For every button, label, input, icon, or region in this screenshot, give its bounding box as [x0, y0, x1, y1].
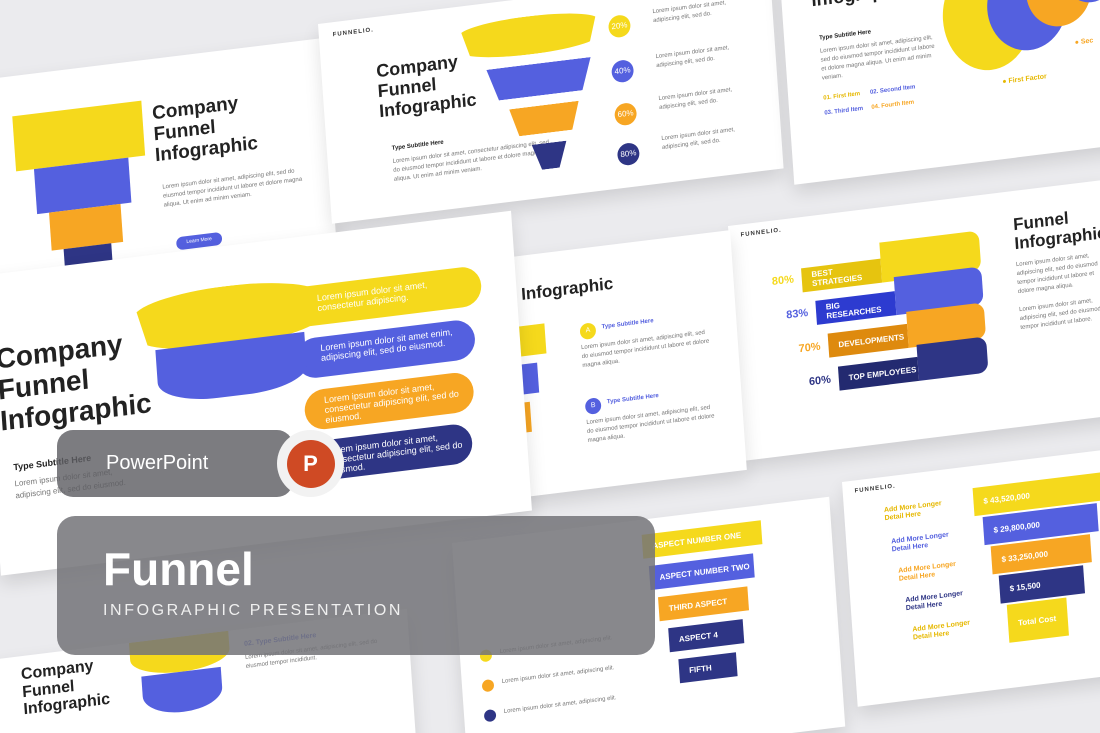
slide: bottom middle stepped funnel: ASPECT NUMBER ONE [652, 530, 741, 550]
slide: funnel percentages: FUNNELIO. [333, 27, 374, 38]
heading [152, 93, 259, 166]
ribbons: 83% [786, 307, 809, 322]
slide: bottom right money funnel: Detail Here [913, 630, 950, 641]
slide: 3D stacked funnel [0, 38, 337, 300]
slide: bottom right money funnel: Add More Longer [898, 561, 956, 575]
slide: bottom left: Funnel [22, 678, 75, 701]
heading: Funnel [377, 74, 437, 101]
slide: bottom middle stepped funnel: THIRD ASPECT [668, 596, 727, 613]
ribbons: BIG RESEARCHES [825, 301, 882, 321]
slide: top right circles: Lorem ipsum dolor sit amet, adipiscing elit, sed do eiusmod tempor incididunt ut labore et dolore magna aliqua. Ut enim ad minim veniam. [820, 35, 935, 82]
funnel: Lorem ipsum dolor sit amet enim, adipiscing elit, sed do eiusmod. [320, 327, 453, 363]
slide: bottom middle stepped funnel: Lorem ipsum dolor sit amet, adipiscing elit. [504, 695, 617, 715]
slide: bottom middle stepped funnel: ASPECT NUMBER TWO [659, 561, 750, 581]
slide: bottom left: Infographic [23, 691, 111, 718]
subtitle: INFOGRAPHIC PRESENTATION [103, 602, 403, 619]
title: Funnel [103, 543, 254, 595]
3D blocks [12, 100, 146, 266]
funnel [136, 267, 482, 479]
heading: Infographic [0, 387, 153, 436]
ribbons: 80% [772, 273, 794, 288]
funnel: Lorem ipsum dolor sit amet, consectetur adipiscing elit, sed do eiusmod. [327, 432, 463, 476]
slide: funnel percentages: Type Subtitle Here [392, 140, 444, 152]
slide: funnel percentages: Lorem ipsum dolor sit amet, adipiscing elit, sed do. [655, 45, 729, 69]
text block: Lorem ipsum dolor sit amet, adipiscing elit, sed do eiusmod tempor incididunt ut labore et dolore magna aliqua. Ut enim ad minim veniam. [162, 168, 302, 209]
funnel: Lorem ipsum dolor sit amet, consectetur adipiscing elit, sed do eiusmod. [324, 381, 459, 425]
slide: right middle funnel ribbons: FUNNELIO. [740, 227, 782, 239]
slide: middle A/B: Lorem ipsum dolor sit amet, adipiscing elit, sed do eiusmod tempor incididunt ut labore et dolore magna aliqua. [581, 330, 709, 369]
slide: bottom right money funnel: Add More Longer [905, 590, 963, 604]
slide: middle A/B: el Infographic [502, 274, 614, 306]
slide: funnel percentages: Lorem ipsum dolor sit amet, consectetur adipiscing elit, sed do eiusmod tempor incididunt ut labore et dolore magna aliqua. Ut enim ad minim veniam. [393, 140, 549, 183]
button: Learn More [186, 236, 212, 245]
funnel: 40% [614, 65, 631, 76]
slide: funnel percentages: Lorem ipsum dolor sit amet, adipiscing elit, sed do. [658, 87, 732, 111]
heading: Company [152, 93, 239, 124]
slide: bottom right money funnel: Detail Here [906, 600, 942, 612]
ribbons [772, 232, 988, 391]
slide: bottom middle stepped funnel: Lorem ipsum dolor sit amet, adipiscing elit. [502, 665, 615, 685]
slide: bottom middle stepped funnel: ASPECT 4 [679, 630, 718, 644]
slide: bottom right money funnel: Add More Longer [884, 500, 942, 514]
slide: top right circles: ● Sec [1074, 37, 1093, 47]
slide: right middle funnel ribbons [728, 180, 1100, 461]
slide: bottom right money funnel: $ 29,800,000 [993, 520, 1040, 534]
slide: right middle funnel ribbons: Lorem ipsum dolor sit amet, adipiscing elit, sed do eiusmod tempor incididunt ut labore et dolore magna aliqua. [1016, 253, 1098, 295]
heading: Funnel [1013, 208, 1069, 234]
slide: bottom right money funnel: Total Cost [1018, 613, 1057, 627]
funnel [461, 14, 640, 170]
slide: funnel percentages [318, 0, 784, 224]
slide: bottom middle stepped funnel: Lorem ipsum dolor sit amet, adipiscing elit. [499, 635, 612, 655]
slide: bottom middle stepped funnel: FIFTH [689, 663, 712, 675]
slide: bottom right money funnel: Detail Here [899, 571, 935, 582]
slide: funnel percentages: Lorem ipsum dolor sit amet, adipiscing elit, sed do. [652, 0, 726, 24]
slide: bottom right money funnel: Add More Longer [912, 619, 970, 634]
slide: bottom left [0, 609, 421, 733]
ribbons: 60% [809, 374, 831, 388]
heading: Infographic [378, 89, 477, 121]
slide: top right circles [780, 0, 1100, 185]
slide: bottom right money funnel: FUNNELIO. [854, 483, 896, 495]
heading [376, 51, 477, 121]
slide: bottom left: 02. Type Subtitle Here [244, 632, 317, 648]
title panel [57, 516, 655, 655]
ribbons: BEST STRATEGIES [811, 268, 863, 288]
slide: top right circles: 03. Third Item 04. Fourth Item [824, 100, 914, 117]
slide: right middle funnel ribbons: Lorem ipsum dolor sit amet, adipiscing elit, sed do eiusmod tempor incididunt ut labore. [1019, 298, 1100, 331]
slide: bottom left: Company [20, 657, 94, 683]
slide: bottom right money funnel: Detail Here [892, 542, 928, 553]
slide: middle A/B: Type Subtitle Here [607, 393, 659, 405]
heading [1013, 208, 1100, 253]
slide: big left funnel: Type Subtitle Here [13, 453, 92, 472]
heading: Infographic [154, 132, 259, 166]
ribbons: DEVELOPMENTS [838, 332, 904, 349]
button [176, 232, 222, 250]
slide: bottom left: Lorem ipsum dolor sit amet, adipiscing elit, sed do eiusmod tempor incididunt. [245, 639, 377, 670]
slide: big left funnel [0, 211, 532, 576]
heading [0, 328, 153, 436]
heading: Funnel [153, 117, 216, 145]
icon: PowerPoint logo: P [303, 450, 318, 476]
funnel: 80% [620, 148, 637, 159]
discs [942, 0, 1100, 70]
PowerPoint badge: PowerPoint [106, 452, 208, 474]
slide: big left funnel: Lorem ipsum dolor sit amet, adipiscing elit, sed do eiusmod. [14, 467, 126, 500]
funnel: Lorem ipsum dolor sit amet, consectetur adipiscing. [317, 280, 427, 313]
slide: middle A/B: A [585, 327, 590, 334]
slide: top right circles: ● First Factor [1002, 73, 1047, 86]
slide: bottom right money funnel: Detail Here [884, 510, 921, 522]
slide: top right circles: Type Subtitle Here [819, 29, 871, 42]
icon: PowerPoint logo [277, 430, 344, 497]
heading: Company [376, 51, 458, 81]
slide: bottom right money funnel [842, 448, 1100, 707]
slide: bottom right money funnel: Add More Longer [891, 531, 949, 545]
ribbons: 70% [798, 341, 821, 355]
ribbons: TOP EMPLOYEES [848, 365, 917, 382]
funnel: 20% [611, 20, 628, 31]
PowerPoint badge [57, 430, 293, 497]
slide: bottom right money funnel: $ 15,500 [1009, 580, 1041, 593]
slide: middle A/B: Lorem ipsum dolor sit amet, adipiscing elit, sed do eiusmod tempor incididunt ut labore et dolore magna aliqua. [586, 405, 715, 444]
funnel: 60% [617, 108, 634, 119]
slide: bottom right money funnel: $ 43,520,000 [983, 491, 1030, 505]
slide: middle A/B: Type Subtitle Here [602, 318, 654, 330]
slide: funnel percentages: Lorem ipsum dolor sit amet, adipiscing elit, sed do. [661, 127, 735, 151]
slide: top right circles: 01. First Item 02. Second Item [823, 84, 916, 102]
slide: middle A/B [470, 230, 747, 502]
slide: bottom right money funnel: $ 33,250,000 [1001, 549, 1048, 564]
slide: middle A/B: B [591, 402, 596, 409]
slide: bottom middle stepped funnel [452, 497, 845, 733]
